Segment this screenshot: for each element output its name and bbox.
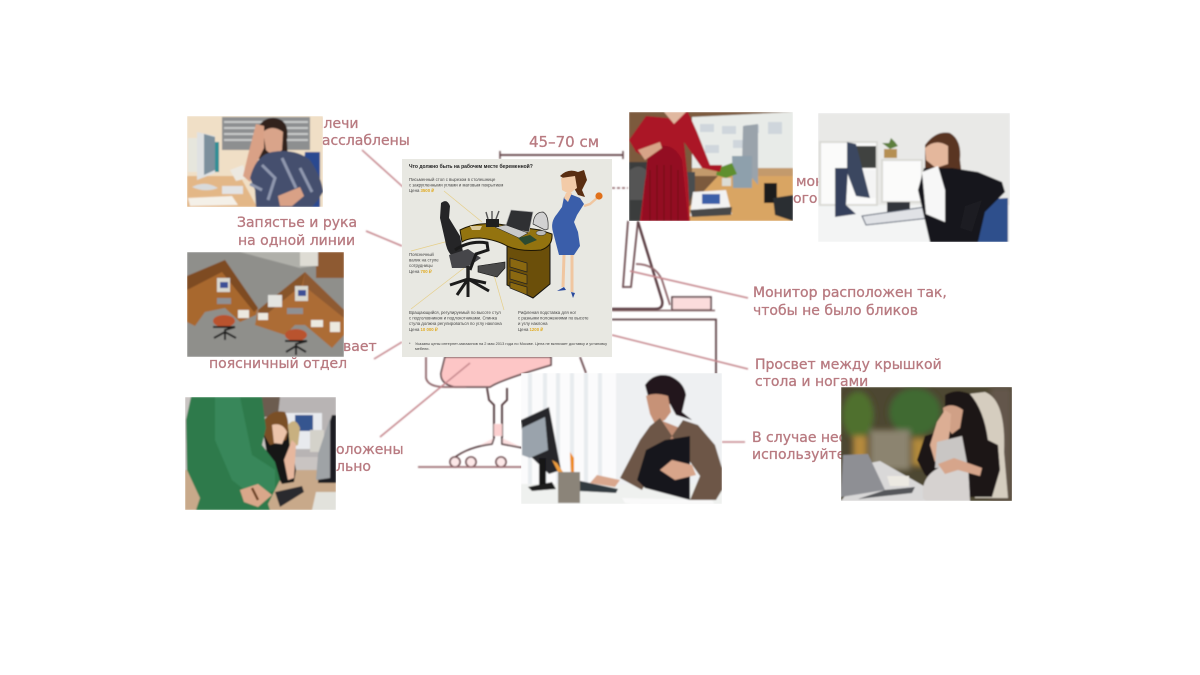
label: shoulders relaxed: расслаблены <box>313 133 410 149</box>
photo: woman with headache at desk <box>187 116 323 207</box>
panel text: lumbar cushion: сотрудницы <box>409 263 433 268</box>
ergonomic diagram: workstation line drawing <box>362 150 748 467</box>
panel text: desk: Цена <box>409 188 421 193</box>
photo: woman in green dress <box>185 397 336 510</box>
panel text: footrest: 1200 ₽ <box>530 327 543 332</box>
distance dimension arrow <box>500 151 623 159</box>
infographic panel: what a pregnant worker's desk should have <box>402 159 612 357</box>
panel text: lumbar cushion: Цена <box>409 269 421 274</box>
panel text: lumbar cushion: Поясничный <box>409 252 434 257</box>
panel text: chair: Вращающийся, регулируемый по высоте стул <box>409 310 501 315</box>
photo: woman in red dress <box>629 112 793 221</box>
photo: overhead office desks <box>187 252 344 357</box>
panel footnote: мебели. <box>415 346 430 351</box>
label: monitor no glare: Монитор расположен так, <box>753 285 947 301</box>
panel text: footrest: и углу наклона <box>518 321 548 326</box>
chair <box>418 357 586 467</box>
label: monitor top: мон <box>796 174 824 190</box>
leader lines <box>411 191 504 310</box>
panel text: chair: Цена <box>409 327 421 332</box>
label: if necessary use: В случае необходимости <box>752 430 936 446</box>
illustration: office chair <box>440 201 489 297</box>
illustration: pregnant woman in blue dress <box>552 170 603 298</box>
label: chair supports lumbar: вает <box>343 339 377 355</box>
label: monitor top: ого <box>793 191 818 207</box>
panel text: lumbar cushion: 700 ₽ <box>421 269 432 274</box>
label: legs placed: оложены <box>336 442 404 458</box>
label: distance to monitor: 45–70 см <box>529 133 599 151</box>
label: if necessary use: используйте <box>752 447 845 463</box>
label: wrist and hand: на одной линии <box>238 233 355 249</box>
photo: woman at computer in brown jacket <box>521 373 722 505</box>
panel text: desk: Письменный стол с вырезом в столешнице <box>409 177 496 182</box>
panel title: Что должно быть на рабочем месте беременной? <box>409 163 533 170</box>
keyboard block <box>672 297 711 310</box>
panel text: chair: стула должна регулироваться по углу наклона <box>409 321 502 326</box>
label: shoulders relaxed: Плечи <box>313 116 358 132</box>
panel text: chair: с подголовником и подлокотниками. Спинка <box>409 316 498 320</box>
panel text: desk: с закругленными углами и матовым покрытием <box>409 182 503 188</box>
label: chair supports lumbar: поясничный отдел <box>209 356 347 372</box>
illustration: laptop and desk items <box>470 210 548 245</box>
panel footnote: * <box>409 341 411 346</box>
desk <box>612 310 716 374</box>
panel footnote: Указаны цены интернет-магазинов на 2 мая 2013 года по Москве. Цена не включает доставку и установку <box>415 341 607 346</box>
panel text: chair: 10 000 ₽ <box>421 327 438 332</box>
label: wrist and hand: Запястье и рука <box>237 215 357 231</box>
label: monitor no glare: чтобы не было бликов <box>753 303 918 319</box>
pointer lines <box>362 150 748 442</box>
photo: woman in chair with headache <box>841 387 1012 501</box>
photo: woman with back pain <box>818 113 1010 242</box>
panel text: lumbar cushion: валик на стуле <box>409 258 439 262</box>
label: legs placed: льно <box>336 459 371 475</box>
label: gap between desk and legs: стола и ногами <box>755 374 868 390</box>
panel text: footrest: с разными положениями по высоте <box>518 316 589 320</box>
monitor side view <box>612 221 670 309</box>
illustration: footrest <box>478 262 505 277</box>
panel text: desk: 3500 ₽ <box>421 188 434 193</box>
illustration: desk <box>460 224 552 298</box>
label: gap between desk and legs: Просвет между крышкой <box>755 357 942 373</box>
panel text: footrest: Цена <box>518 327 530 332</box>
panel text: footrest: Рифленая подставка для ног <box>518 310 577 315</box>
